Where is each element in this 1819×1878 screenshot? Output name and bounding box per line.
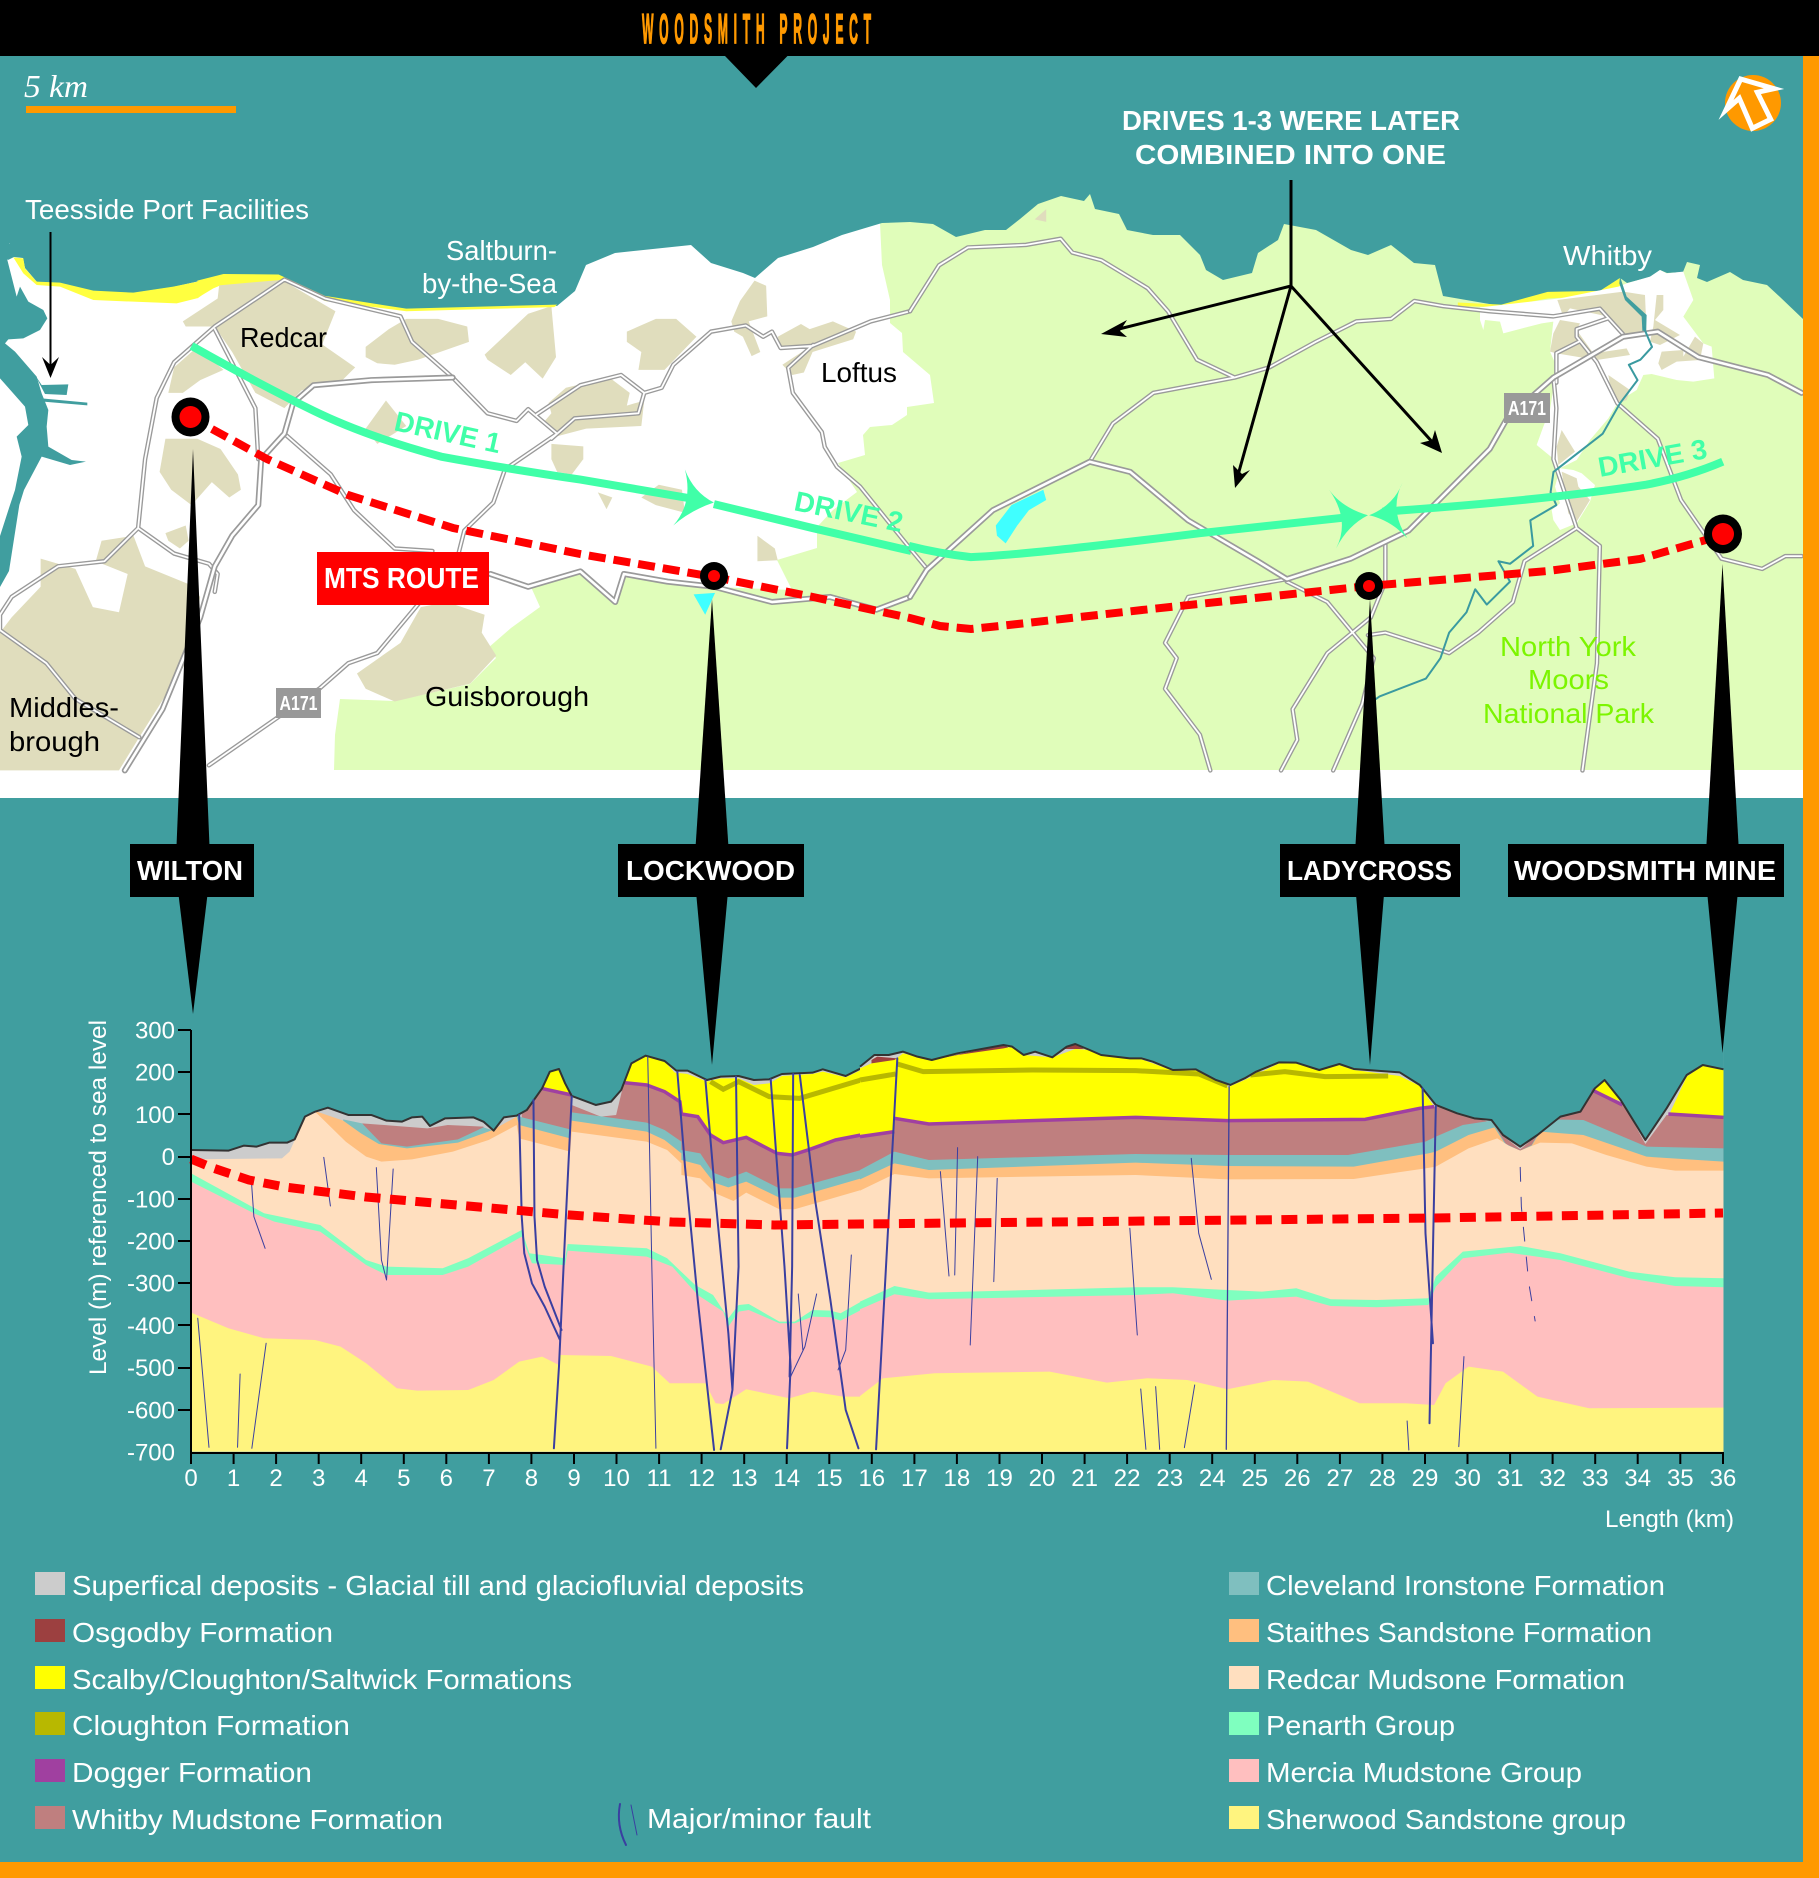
label: Redcar: Redcar [240, 322, 327, 353]
panel: geological cross-section chart [85, 1013, 1736, 1533]
sea [0, 56, 1803, 319]
station marker: Wilton [172, 398, 210, 436]
x-axis tick labels: 2 [269, 1465, 283, 1492]
legend: fault key [619, 1803, 871, 1845]
header band [0, 0, 1819, 88]
callout: drives combined: COMBINED INTO ONE [1135, 139, 1446, 170]
arrows: callout to drives [1101, 180, 1442, 488]
site marker: WOODSMITH MINE [1508, 564, 1784, 1053]
x-axis tick labels: 9 [567, 1465, 581, 1492]
site marker: LOCKWOOD [618, 599, 804, 1065]
y-axis tick labels: -200 [127, 1228, 175, 1256]
MTS route dashed line on map [190, 417, 1723, 629]
x-axis tick labels: 11 [647, 1465, 672, 1492]
x-axis tick labels: 4 [355, 1465, 368, 1492]
drive 2 east line [909, 516, 1356, 557]
legend: left column: Scalby/Cloughton/Saltwick Formations [72, 1664, 572, 1695]
scale bar: 5 km [24, 68, 236, 113]
label: DRIVE 2: DRIVE 2 [792, 486, 906, 538]
x-axis tick labels: 12 [688, 1465, 715, 1492]
lake near Lockwood [694, 593, 715, 615]
x-axis tick labels: 14 [773, 1465, 800, 1492]
x-axis tick labels: 32 [1539, 1465, 1566, 1492]
x-axis tick labels: 21 [1071, 1465, 1098, 1492]
x-axis tick labels: 22 [1114, 1465, 1140, 1492]
x-axis tick labels: 29 [1412, 1465, 1438, 1492]
x-axis tick labels: 0 [184, 1465, 198, 1492]
y-axis tick labels: 200 [135, 1060, 175, 1087]
label: Teesside Port Facilities: Teesside Port Facilities [25, 194, 309, 225]
x-axis tick labels: 15 [816, 1465, 843, 1492]
white strip below map [0, 770, 1803, 798]
lake east [996, 490, 1046, 543]
Esk estuary [1619, 277, 1647, 337]
urban areas west [0, 280, 856, 770]
site marker: LOCKWOOD: LOCKWOOD [626, 855, 795, 886]
x-axis tick labels: 23 [1156, 1465, 1183, 1492]
label: Middlesbrough: Middles- [9, 692, 119, 723]
x-axis tick labels: 33 [1582, 1465, 1609, 1492]
x-axis tick labels: 1 [227, 1465, 240, 1492]
x-axis tick labels: 35 [1667, 1465, 1694, 1492]
x-axis tick labels: 5 [397, 1465, 410, 1492]
chart axes [178, 1030, 1723, 1464]
label: DRIVE 1: DRIVE 1 [392, 406, 504, 459]
chart west half [191, 1013, 861, 1452]
x-axis tick labels: 30 [1454, 1465, 1481, 1492]
label: Loftus: Loftus [821, 357, 897, 388]
site marker: WILTON [130, 449, 254, 1014]
label: Guisborough: Guisborough [425, 681, 589, 712]
roads west [0, 280, 910, 770]
x-axis tick labels: 10 [603, 1465, 630, 1492]
legend: left column: Cloughton Formation [72, 1710, 350, 1741]
drive 3 arrowhead [1369, 482, 1407, 538]
site marker: LADYCROSS [1280, 599, 1460, 1065]
legend: right column: Mercia Mudstone Group [1266, 1757, 1582, 1788]
label: North York Moors National Park: National Park [1483, 698, 1654, 729]
x-axis tick labels: 25 [1241, 1465, 1268, 1492]
y-axis tick labels: -700 [127, 1440, 175, 1466]
road sign: A171 east: A171 [1508, 398, 1546, 420]
label: Whitby: Whitby [1563, 240, 1652, 271]
map east half [996, 209, 1620, 543]
legend: right column: Penarth Group [1266, 1710, 1455, 1741]
label: North York Moors National Park: Moors [1528, 664, 1609, 695]
national park land [334, 150, 1803, 770]
legend: right column [1229, 1570, 1665, 1835]
x-axis tick labels: 18 [944, 1465, 970, 1492]
x-axis title: Length (km) [1605, 1506, 1734, 1533]
drive 2 arrowhead [1329, 490, 1368, 548]
x-axis tick labels: 13 [731, 1465, 758, 1492]
map west half [0, 274, 911, 770]
beach east [1458, 278, 1620, 307]
legend: left column: Whitby Mudstone Formation [72, 1804, 443, 1835]
label: DRIVE 3: DRIVE 3 [1596, 433, 1709, 483]
callout: drives combined [1122, 105, 1460, 170]
callout: drives combined: DRIVES 1-3 WERE LATER [1122, 105, 1460, 136]
title: WOODSMITH PROJECT [642, 5, 871, 53]
x-axis tick labels: 20 [1029, 1465, 1055, 1492]
Whitby town area [1480, 270, 1714, 530]
station marker: Ladycross [1355, 572, 1383, 600]
legend: right column: Sherwood Sandstone group [1266, 1804, 1626, 1835]
roads and river east [909, 239, 1802, 770]
small urban patch [1035, 209, 1046, 222]
road sign: A171 west [276, 688, 321, 718]
x-axis tick labels: 31 [1497, 1465, 1523, 1492]
y-axis tick labels: -400 [127, 1313, 175, 1340]
x-axis tick labels: 28 [1369, 1465, 1396, 1492]
y-axis tick labels: -600 [127, 1397, 175, 1424]
x-axis tick labels: 3 [312, 1465, 325, 1492]
x-axis tick labels: 36 [1710, 1465, 1736, 1492]
icon: compass north arrow [1725, 75, 1781, 131]
site marker: WOODSMITH MINE: WOODSMITH MINE [1514, 855, 1776, 886]
legend: left column: Osgodby Formation [72, 1617, 333, 1648]
y-axis title: Level (m) referenced to sea level [85, 1020, 112, 1375]
label: Middlesbrough: brough [9, 726, 100, 757]
MTS route tag [317, 552, 489, 605]
label: Middlesbrough [9, 692, 119, 757]
chart east half [860, 1013, 1723, 1452]
panel: route map [0, 56, 1803, 798]
legend: fault key: Major/minor fault [647, 1803, 871, 1834]
legend: left column [35, 1570, 804, 1835]
station marker: Lockwood [700, 562, 728, 590]
legend: left column: Superfical deposits - Glacial till and glaciofluvial deposits [72, 1570, 804, 1601]
y-axis tick labels: -300 [127, 1271, 175, 1298]
arrow: Teesside [42, 232, 59, 378]
station marker: Woodsmith [1704, 514, 1742, 554]
x-axis tick labels: 34 [1624, 1465, 1651, 1492]
x-axis tick labels: 6 [440, 1465, 453, 1492]
x-axis tick labels [184, 1465, 1736, 1492]
label: North York Moors National Park [1483, 631, 1654, 729]
x-axis tick labels: 26 [1284, 1465, 1311, 1492]
x-axis tick labels: 27 [1327, 1465, 1353, 1492]
drive 2 west line [714, 504, 911, 551]
drive 1 line [192, 346, 688, 498]
y-axis tick labels: -100 [127, 1186, 175, 1213]
label: Saltburn: Saltburn- [446, 235, 557, 266]
site marker: LADYCROSS: LADYCROSS [1287, 855, 1452, 886]
label: North York Moors National Park: North York [1500, 631, 1636, 662]
scale bar: 5 km: 5 km [24, 68, 88, 104]
y-axis tick labels: 300 [135, 1018, 175, 1044]
river Esk [1365, 327, 1652, 707]
drive 1 arrowhead [673, 469, 714, 526]
label: Saltburn [422, 235, 558, 299]
y-axis tick labels: 100 [135, 1102, 175, 1129]
x-axis tick labels: 16 [858, 1465, 885, 1492]
x-axis tick labels: 19 [986, 1465, 1013, 1492]
road sign: A171 west: A171 [280, 693, 318, 715]
x-axis tick labels: 7 [482, 1465, 496, 1492]
y-axis tick labels: 0 [162, 1144, 175, 1171]
y-axis tick labels [127, 1018, 175, 1466]
y-axis tick labels: -500 [127, 1355, 175, 1382]
road sign: A171 east [1504, 393, 1550, 423]
x-axis tick labels: 24 [1199, 1465, 1226, 1492]
label: Saltburn: by-the-Sea [422, 268, 558, 299]
drive 3 line [1382, 462, 1723, 512]
x-axis tick labels: 17 [901, 1465, 928, 1492]
legend: right column: Staithes Sandstone Formation [1266, 1617, 1652, 1648]
Tees estuary, port and west beach [0, 240, 233, 587]
site marker: WILTON: WILTON [137, 855, 243, 886]
beach [197, 274, 557, 311]
legend: right column: Cleveland Ironstone Formation [1266, 1570, 1665, 1601]
x-axis tick labels: 8 [525, 1465, 538, 1492]
legend: left column: Dogger Formation [72, 1757, 312, 1788]
MTS route dashed line on chart [191, 1159, 1723, 1225]
MTS route tag: MTS ROUTE [324, 563, 479, 595]
legend: right column: Redcar Mudsone Formation [1266, 1664, 1625, 1695]
